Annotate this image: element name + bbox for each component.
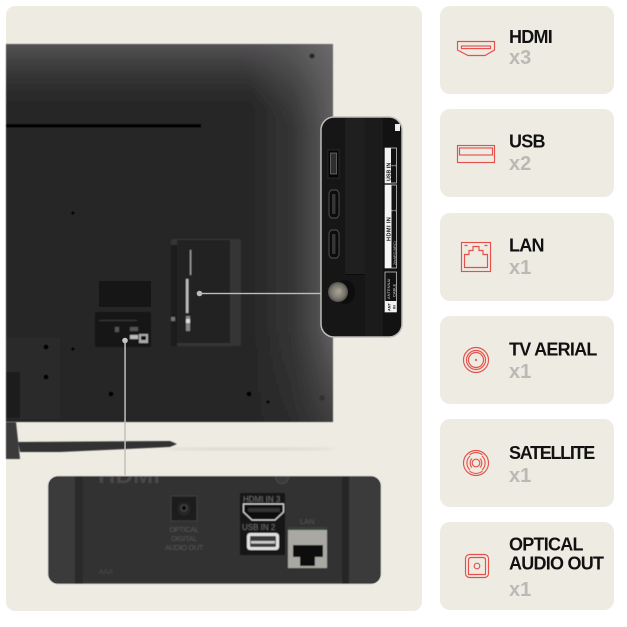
icon: TV aerial xyxy=(464,348,488,372)
count: x3: x3 xyxy=(509,47,531,69)
heading: USB: USB xyxy=(509,132,546,152)
heading: Satellite: SATELLITE xyxy=(509,443,595,463)
USB IN label xyxy=(385,148,398,183)
card: HDMI xyxy=(440,6,614,94)
antenna label: ANT xyxy=(387,303,391,311)
icon: LAN xyxy=(462,242,490,272)
heading: Optical audio out: OPTICAL xyxy=(509,534,584,554)
heading: LAN: LAN xyxy=(509,236,544,256)
antenna label xyxy=(385,272,396,312)
count: x1: x1 xyxy=(509,361,531,383)
TV stand xyxy=(6,422,335,459)
HDMI IN 3 port xyxy=(240,493,285,522)
rear connector recess xyxy=(95,312,151,347)
icon: USB xyxy=(458,146,494,162)
inset: side ports xyxy=(321,117,402,337)
card: LAN xyxy=(440,213,614,301)
optical label: AUDIO OUT xyxy=(165,543,204,552)
count: x1: x1 xyxy=(509,257,531,279)
USB port xyxy=(328,150,339,178)
HDMI IN label: 2(eARC/ARC) xyxy=(393,240,397,265)
HDMI IN label: 1 xyxy=(392,209,398,212)
card: Satellite xyxy=(440,419,614,507)
card: USB xyxy=(440,109,614,197)
optical label: DIGITAL xyxy=(171,534,197,543)
HDMI port 2 xyxy=(329,230,339,258)
count: x1: x1 xyxy=(509,465,531,487)
leader line to side inset xyxy=(197,291,321,296)
rear label plate xyxy=(99,281,151,307)
USB IN 2 port: USB IN 2 xyxy=(242,523,276,532)
antenna label: IN xyxy=(392,305,396,309)
USB IN 2 port xyxy=(240,522,285,555)
icon: Optical audio out xyxy=(466,554,488,578)
panel: TV rear view xyxy=(6,6,422,611)
inset: rear ports xyxy=(48,465,381,584)
HDMI IN 3 port: HDMI IN 3 xyxy=(243,495,281,504)
count: x1: x1 xyxy=(509,579,531,601)
HDMI IN label xyxy=(385,185,398,268)
icon: HDMI xyxy=(458,42,494,56)
optical label: OPTICAL xyxy=(169,525,199,534)
antenna label: ANTENNA/ xyxy=(386,278,391,299)
screw xyxy=(274,476,290,484)
LAN label: LAN xyxy=(300,517,315,526)
card: TV aerial xyxy=(440,316,614,404)
side connector recess xyxy=(171,239,241,346)
card: Optical audio out: AUDIO OUT xyxy=(509,554,604,574)
card: Optical audio out xyxy=(440,522,614,610)
HDMI port 1 xyxy=(329,190,339,218)
LAN port xyxy=(288,527,327,568)
icon: Satellite xyxy=(464,450,488,476)
heading: HDMI: HDMI xyxy=(509,27,552,47)
HDMI IN label: HDMI IN xyxy=(386,217,392,241)
USB IN label: USB IN xyxy=(386,163,392,181)
count: x2: x2 xyxy=(509,153,531,175)
model label: AAA xyxy=(99,569,113,576)
TV back panel xyxy=(6,44,333,422)
heading: TV aerial: TV AERIAL xyxy=(509,340,597,360)
faded HDMI logo: HDMI xyxy=(98,465,160,488)
leader line to bottom inset xyxy=(122,338,128,475)
aerial connector xyxy=(328,280,355,304)
optical port xyxy=(171,496,197,521)
USB IN label: 1 xyxy=(392,164,398,167)
antenna label: CABLE xyxy=(392,284,396,297)
